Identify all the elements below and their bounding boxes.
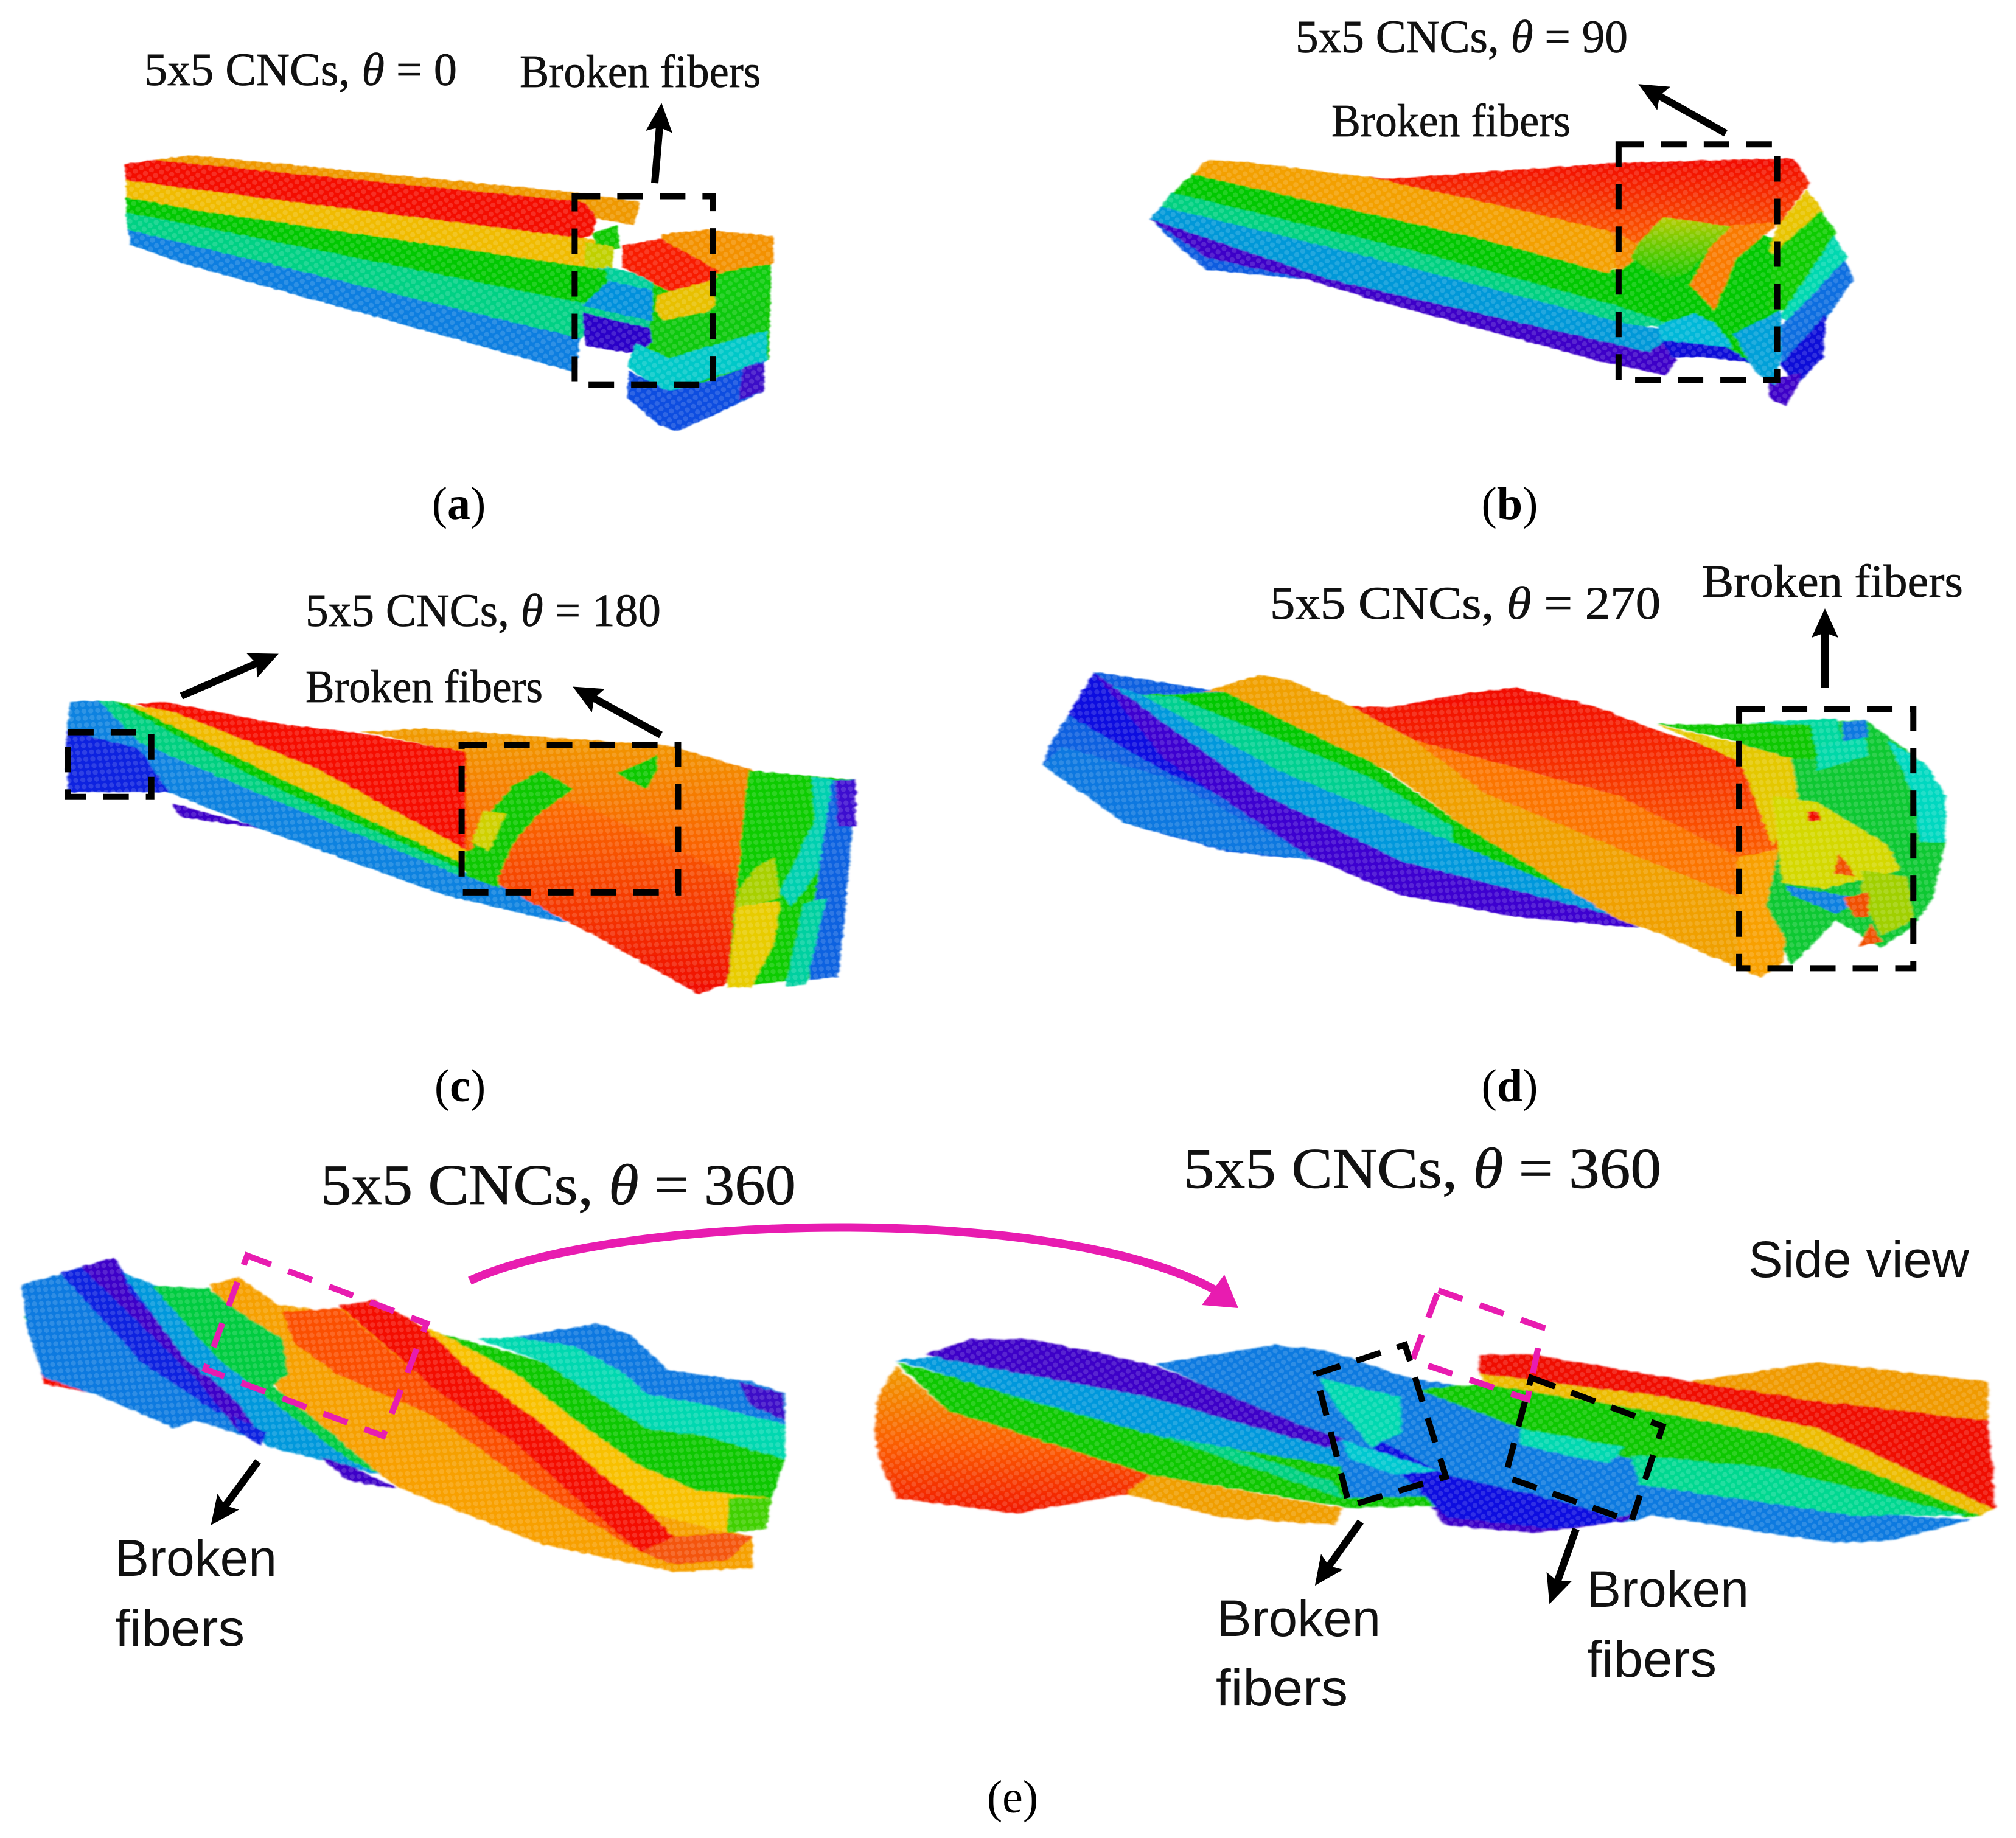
label e side right xyxy=(1587,1561,1749,1688)
sphere texture e side xyxy=(870,1326,2014,1643)
fiber bundle a xyxy=(124,155,773,431)
label c: Broken fibers xyxy=(305,661,543,712)
sphere texture b xyxy=(1144,152,1862,414)
dashed box c small xyxy=(68,733,152,797)
dashed box c large xyxy=(462,745,678,893)
sphere texture e front xyxy=(12,1247,803,1588)
title e side: 5x5 CNCs, θ = 360 xyxy=(1184,1137,1661,1200)
panel c: theta 180 xyxy=(61,585,864,1112)
arrow e side left xyxy=(1324,1522,1361,1573)
dashed box b xyxy=(1619,144,1777,380)
caption d: (d) xyxy=(1482,1060,1538,1112)
pink curved arrow xyxy=(470,1228,1238,1308)
label e front: Broken xyxy=(115,1530,277,1587)
pink dashed box side xyxy=(1412,1290,1543,1399)
dashed box d xyxy=(1739,709,1913,968)
dashed box side right xyxy=(1505,1378,1662,1522)
title e front: 5x5 CNCs, θ = 360 xyxy=(321,1154,796,1217)
title c: 5x5 CNCs, θ = 180 xyxy=(305,585,661,636)
sphere texture a xyxy=(110,146,785,450)
panel d: theta 270 xyxy=(1034,556,1984,1112)
dashed box a xyxy=(574,196,713,385)
panel b: theta 90 xyxy=(1144,12,1862,529)
pink dashed box front xyxy=(206,1256,427,1436)
arrow a xyxy=(655,119,660,183)
arrow d xyxy=(1821,624,1829,688)
label b: Broken fibers xyxy=(1331,96,1571,147)
fiber bundle e side view xyxy=(874,1339,1995,1543)
sphere texture c xyxy=(61,694,864,998)
title d: 5x5 CNCs, θ = 270 xyxy=(1270,578,1661,629)
label e front xyxy=(115,1530,277,1657)
arrow b xyxy=(1652,92,1726,133)
label d: Broken fibers xyxy=(1702,556,1963,607)
title a: 5x5 CNCs, θ = 0 xyxy=(144,44,457,96)
dashed box side left xyxy=(1316,1345,1446,1506)
label e side left xyxy=(1216,1590,1381,1716)
panel e: theta 360 xyxy=(12,1137,2014,1823)
arrow e front xyxy=(220,1461,258,1513)
side view label: Side view xyxy=(1748,1231,1969,1288)
arrow c left xyxy=(181,660,264,696)
label e side right: fibers xyxy=(1587,1631,1717,1688)
label e side left: fibers xyxy=(1216,1659,1348,1716)
title b: 5x5 CNCs, θ = 90 xyxy=(1296,12,1628,63)
arrow e side right xyxy=(1555,1529,1576,1589)
caption c: (c) xyxy=(434,1060,486,1112)
panel a: theta 0 xyxy=(110,44,785,529)
label e side right: Broken xyxy=(1587,1561,1749,1618)
arrow c right xyxy=(587,694,661,735)
fiber bundle e front view xyxy=(22,1258,785,1572)
label e front: fibers xyxy=(115,1600,245,1657)
fiber bundle c xyxy=(67,701,856,994)
fiber bundle d xyxy=(1042,672,1945,978)
caption e: (e) xyxy=(987,1772,1038,1823)
label a: Broken fibers xyxy=(520,46,761,97)
fiber bundle b xyxy=(1149,158,1854,406)
caption a: (a) xyxy=(432,478,486,529)
sphere texture d xyxy=(1034,669,1984,986)
label e side left: Broken xyxy=(1217,1590,1381,1647)
caption b: (b) xyxy=(1482,478,1538,529)
